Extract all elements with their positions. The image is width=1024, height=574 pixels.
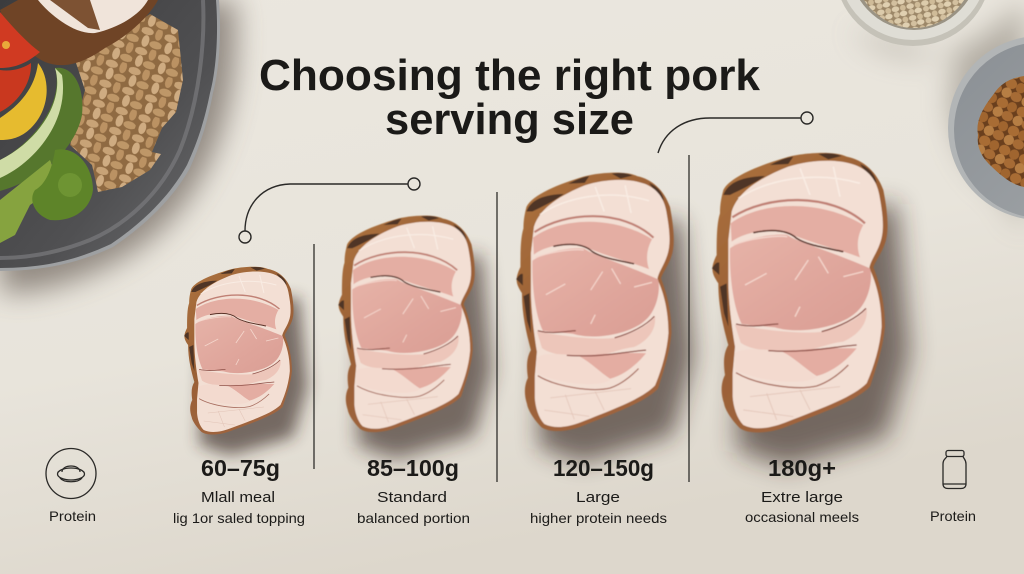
serving label: 120-150g [530,455,667,526]
yellow pepper [0,63,47,140]
serving label: 85-100g: balanced portion [357,510,470,526]
plate [0,0,220,271]
label: protein left: Protein [49,508,96,524]
serving label: 180g+: Extre large [761,489,843,506]
serving label: 180g+: occasional meels [745,509,859,525]
serving label: 60-75g: 60–75g [201,455,280,481]
serving label: 60-75g [173,455,305,526]
plate shadow [0,0,236,293]
serving label: 120-150g: higher protein needs [530,510,667,526]
serving label: 60-75g: Mlall meal [201,489,275,506]
plate of food [0,0,236,293]
broccoli [0,160,60,243]
title: Choosing the right pork [259,51,761,100]
pork chop: 60-75g [184,267,307,455]
pork chop: 180g+ [712,153,910,467]
serving label: 85-100g: Standard [377,489,447,506]
grains [70,14,183,192]
serving label: 120-150g: 120–150g [553,455,654,481]
tomato [0,12,40,68]
label: protein right: Protein [930,508,976,524]
callout line: small serving [239,178,420,243]
callout line: large serving [658,112,813,153]
serving label: 60-75g: lig 1or saled topping [173,510,305,526]
serving label: 85-100g: 85–100g [367,455,459,481]
cucumber [0,68,82,191]
column dividers [314,155,689,482]
icon: protein jar [943,450,966,488]
serving label: 180g+ [745,455,859,525]
title: serving size [385,95,634,144]
pork chop: 85-100g [338,216,492,459]
serving label: 180g+: 180g+ [768,455,836,481]
serving label: 85-100g [357,455,470,526]
pork chop: 120-150g [516,173,694,463]
top right tabletop shadow [850,0,1024,230]
roast pork on plate [0,0,158,65]
icon: protein dish [46,448,96,498]
title [259,51,761,144]
glass jar of grains [835,0,991,46]
grey bowl of beans [948,36,1024,220]
serving label: 120-150g: Large [576,489,620,506]
